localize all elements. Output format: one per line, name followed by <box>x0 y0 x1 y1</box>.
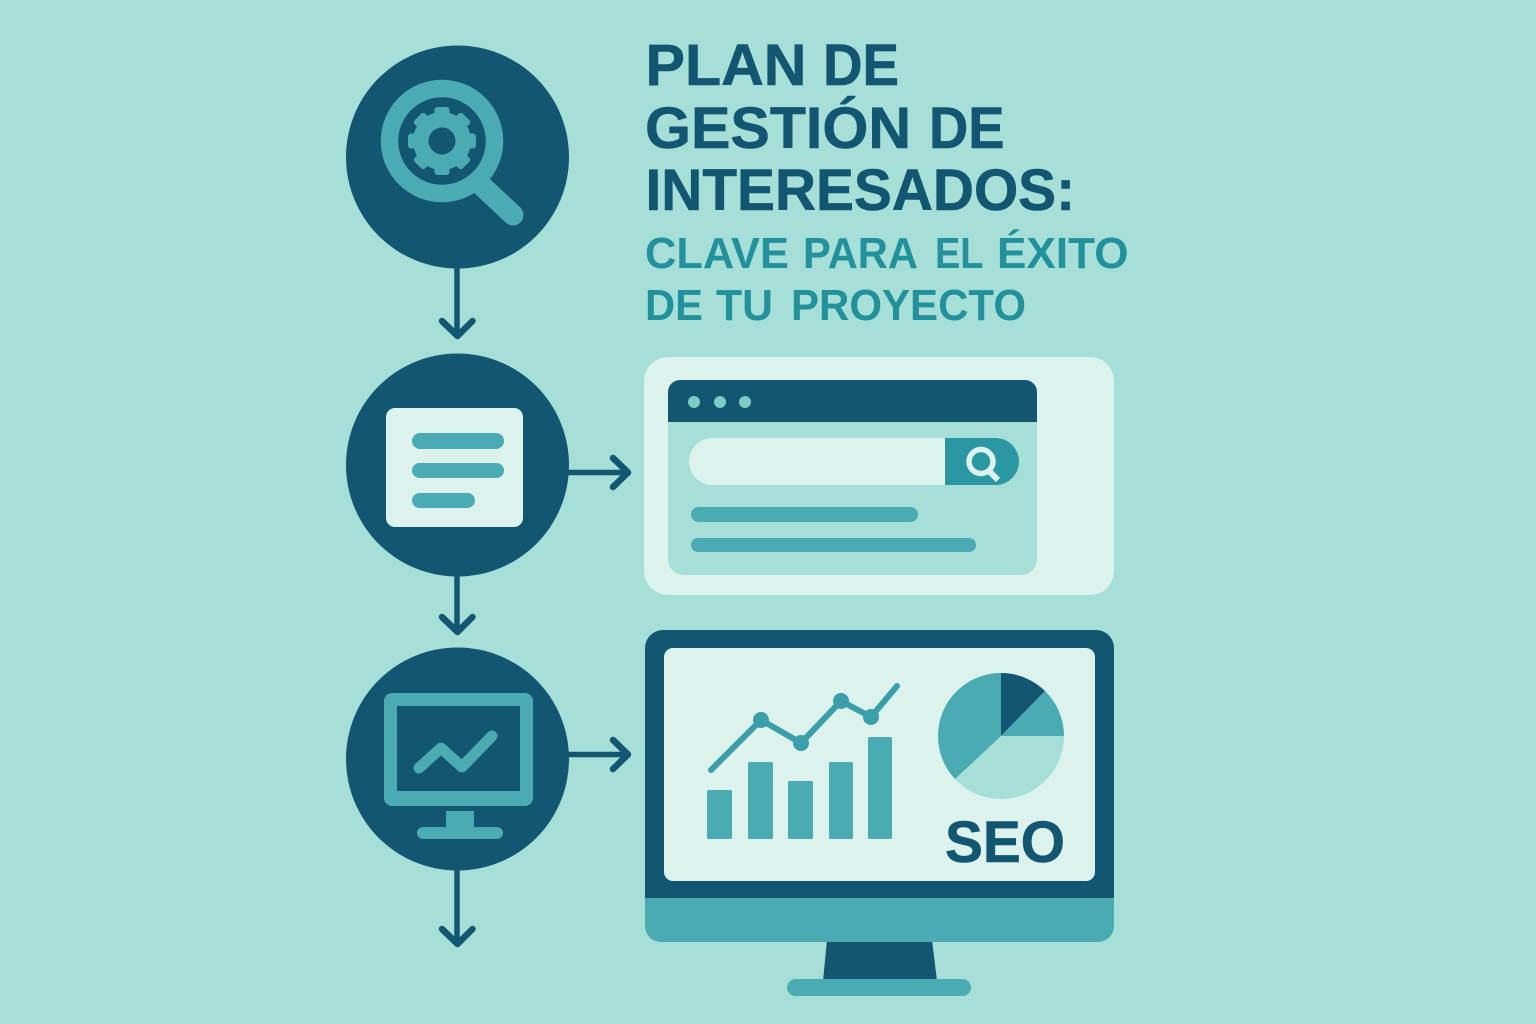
title: DE <box>929 96 1004 161</box>
result lines <box>691 507 976 552</box>
title: INTERESADOS: <box>646 158 1075 223</box>
arrow: circle 2 to search panel <box>565 458 628 487</box>
title: GESTIÓN <box>645 96 911 161</box>
arrow: circle 2 to circle 3 <box>442 570 472 632</box>
arrow: circle 3 to monitor <box>565 740 628 769</box>
subtitle: DE <box>645 281 703 330</box>
subtitle: ÉXITO <box>997 228 1128 278</box>
browser window <box>668 380 1037 575</box>
subtitle: EL <box>935 229 984 278</box>
subtitle <box>645 228 1128 330</box>
icon: screen with trend line <box>346 648 569 870</box>
label: SEO: SEO <box>945 810 1065 875</box>
panel: monitor with SEO dashboard <box>645 630 1114 996</box>
arrow: circle 1 to circle 2 <box>442 262 472 336</box>
line chart <box>711 686 897 770</box>
title: DE <box>823 33 899 98</box>
icon: document list <box>346 354 569 576</box>
subtitle: PROYECTO <box>791 281 1026 330</box>
panel: browser search <box>644 357 1114 595</box>
subtitle: CLAVE <box>645 229 789 278</box>
icon: magnifying glass with gear <box>346 46 569 268</box>
title <box>645 33 1075 223</box>
subtitle: TU <box>716 281 773 330</box>
arrow: circle 3 downward <box>442 864 472 944</box>
bar chart <box>707 737 892 839</box>
search bar <box>689 438 1019 485</box>
pie chart <box>938 673 1064 799</box>
title: PLAN <box>646 33 806 98</box>
subtitle: PARA <box>803 229 918 278</box>
